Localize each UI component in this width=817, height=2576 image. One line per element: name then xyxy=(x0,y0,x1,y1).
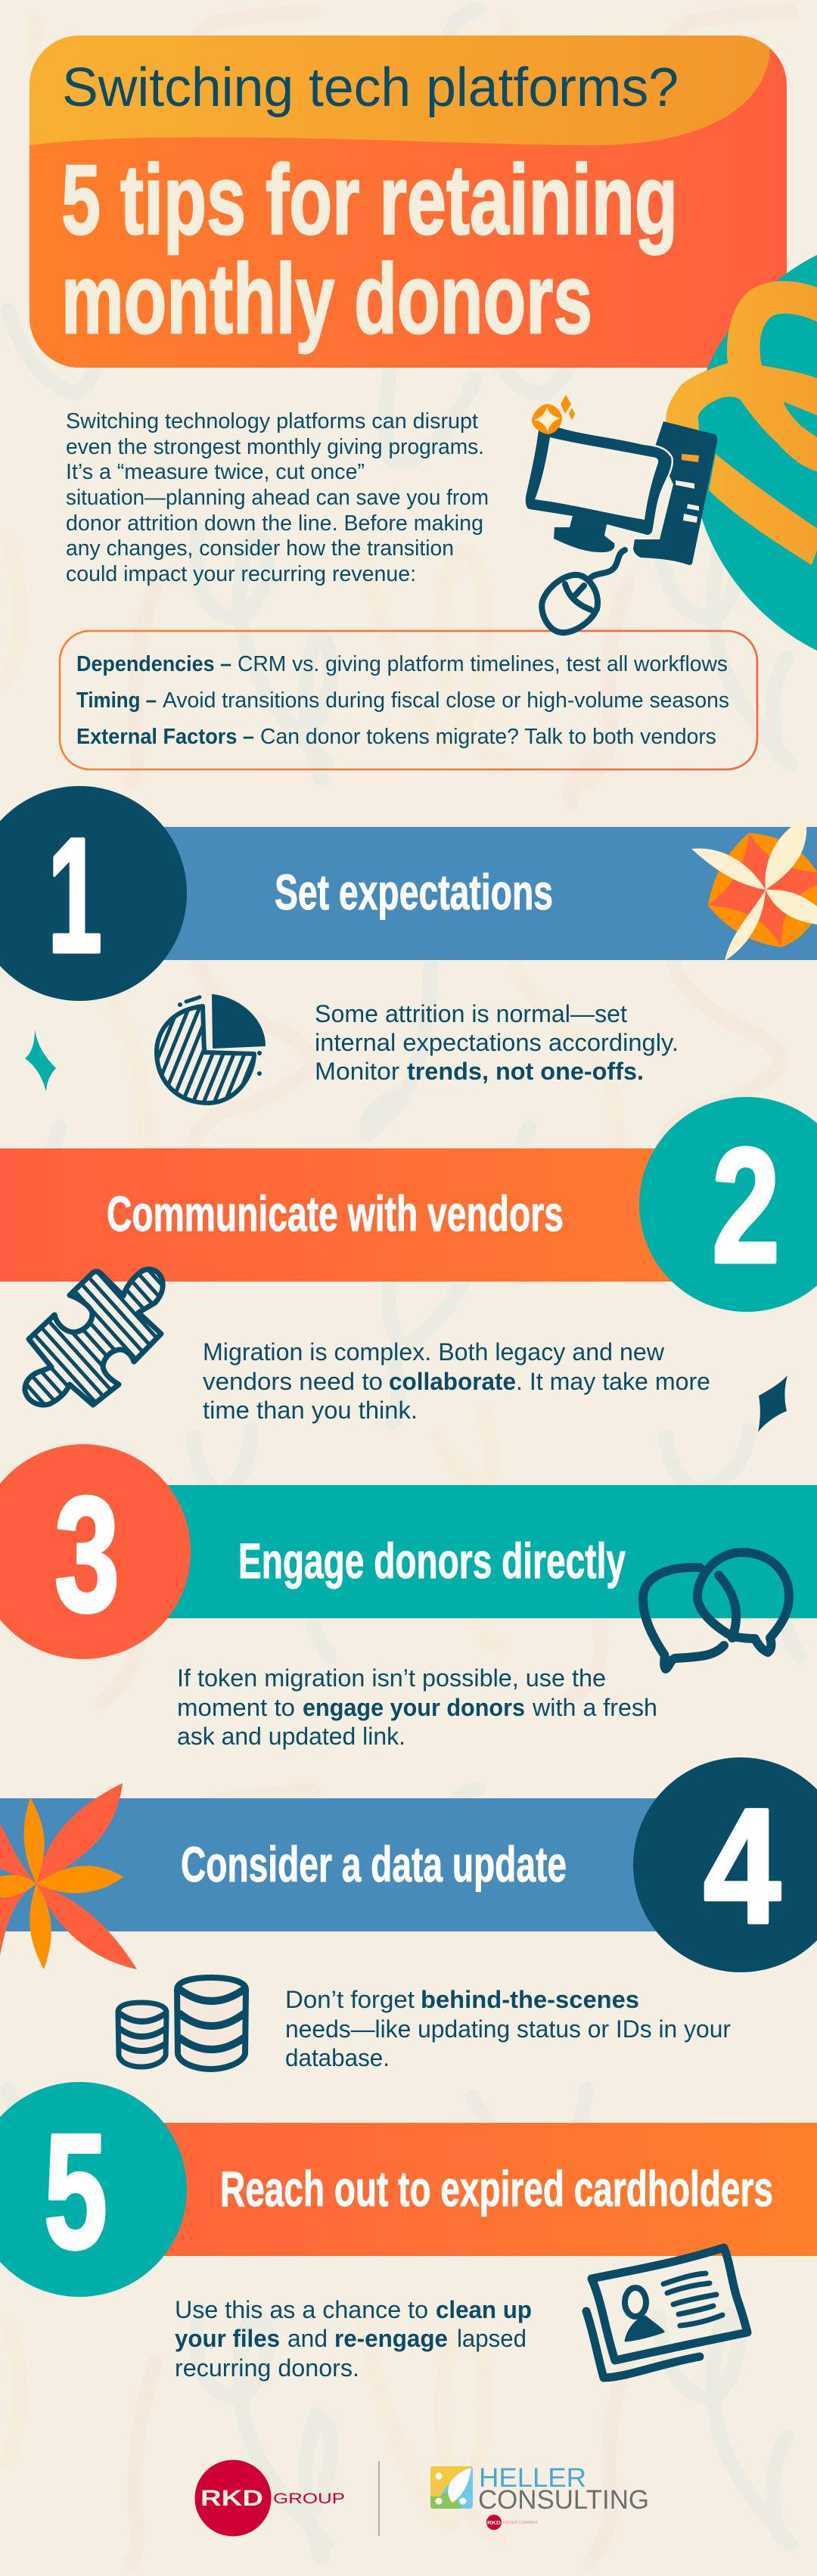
small RKD mark: GROUP COMPANY xyxy=(503,2521,539,2525)
body text 3: with a fresh xyxy=(532,1694,657,1721)
panel: tip 2 xyxy=(0,1097,817,1432)
icon: Heller mark xyxy=(430,2466,473,2509)
body text 4: Don’t forget xyxy=(285,1986,415,2013)
body text 2: vendors need to xyxy=(203,1368,383,1395)
number 5: 5 xyxy=(44,2099,107,2282)
body text 5: your files xyxy=(175,2325,280,2352)
body text 5 xyxy=(175,2296,532,2382)
logo: Heller Consulting xyxy=(430,2463,649,2530)
panel: considerations box xyxy=(60,631,757,769)
text block: intro: Switching technology platforms can disrupt xyxy=(66,409,478,433)
text: timing: Avoid transitions during fiscal close or high-volume seasons xyxy=(163,688,729,713)
text block: intro: situation—planning ahead can save you from xyxy=(66,486,489,510)
body text 4: behind-the-scenes xyxy=(421,1986,639,2013)
panel: title header xyxy=(23,23,787,368)
text block: intro: could impact your recurring revenue: xyxy=(66,562,416,586)
text: external factors: External Factors – xyxy=(76,725,254,749)
flower 2 xyxy=(0,1783,137,1969)
body text 3: ask and updated link. xyxy=(177,1723,405,1750)
icon: pie chart xyxy=(157,995,265,1103)
banner 3 xyxy=(0,1485,817,1618)
number circle 3 xyxy=(0,1444,191,1659)
banner 5 xyxy=(0,2123,817,2256)
body text 5: clean up xyxy=(436,2296,532,2323)
body text 1: Monitor xyxy=(315,1058,399,1085)
panel: tip 1 xyxy=(0,786,817,1103)
text block: intro xyxy=(66,409,489,586)
text block: intro: donor attrition down the line. Before making xyxy=(66,511,483,536)
body text 3: engage your donors xyxy=(303,1694,525,1721)
divider xyxy=(378,2461,380,2536)
body text 5: Use this as a chance to xyxy=(175,2296,428,2323)
heading 2: Communicate with vendors xyxy=(107,1185,564,1241)
icon: computer with mouse xyxy=(526,395,717,632)
number circle 1 xyxy=(0,786,187,1001)
body text 4: needs—like updating status or IDs in your xyxy=(285,2015,731,2043)
body text 3 xyxy=(177,1664,657,1750)
mouse xyxy=(542,550,625,632)
banner 1 xyxy=(0,827,817,960)
decoration: teal blob with orange ribbon xyxy=(666,255,817,651)
text: dependencies: Dependencies – xyxy=(76,652,231,676)
body text 3: moment to xyxy=(177,1694,295,1721)
body text 1: trends, not one-offs. xyxy=(407,1058,644,1085)
text: external factors: Can donor tokens migrate? Talk to both vendors xyxy=(260,725,716,749)
flower 1 xyxy=(691,817,817,961)
title: 5 tips for retaining monthly donors: monthly donors xyxy=(61,243,592,354)
panel: tip 4 xyxy=(0,1757,817,2071)
body text 5: re-engage xyxy=(334,2325,448,2352)
body text 1 xyxy=(315,1000,679,1085)
icon: dark sparkle xyxy=(758,1375,787,1432)
heading 3: Engage donors directly xyxy=(238,1533,626,1589)
panel: tip 5 xyxy=(0,2082,817,2382)
heading: switching tech platforms: Switching tech platforms? xyxy=(62,57,679,118)
logo: RKD Group: GROUP xyxy=(273,2491,345,2507)
title: 5 tips for retaining monthly donors xyxy=(61,144,678,354)
body text 3: If token migration isn’t possible, use the xyxy=(177,1664,606,1692)
logo: RKD Group xyxy=(195,2460,345,2536)
body text 5: lapsed xyxy=(457,2325,527,2352)
sparkles xyxy=(532,404,562,434)
number 3: 3 xyxy=(54,1462,120,1645)
icon: puzzle piece xyxy=(25,1269,163,1405)
banner 2 xyxy=(0,1148,817,1282)
logo: Heller Consulting: CONSULTING xyxy=(478,2485,649,2515)
icon: ID card xyxy=(586,2248,747,2378)
body text 2: Migration is complex. Both legacy and new xyxy=(203,1338,665,1366)
banner 4 xyxy=(0,1798,817,1931)
body text 2 xyxy=(203,1338,710,1424)
number 4: 4 xyxy=(704,1774,781,1957)
body text 1: internal expectations accordingly. xyxy=(315,1029,679,1056)
body text 5: and xyxy=(287,2325,328,2352)
body text 2: time than you think. xyxy=(203,1397,418,1424)
logo: RKD Group: RKD xyxy=(200,2486,263,2511)
small RKD mark xyxy=(486,2515,539,2530)
text block: intro: even the strongest monthly giving programs. xyxy=(66,435,484,459)
body text 5: recurring donors. xyxy=(175,2354,359,2382)
icon: speech bubbles xyxy=(643,1552,789,1669)
body text 4: database. xyxy=(285,2044,390,2071)
monitor xyxy=(526,426,672,552)
number circle 4 xyxy=(633,1757,817,1972)
heading 4: Consider a data update xyxy=(181,1836,567,1892)
body text 1: Some attrition is normal—set xyxy=(315,1000,627,1027)
body text 4 xyxy=(285,1986,731,2071)
small RKD mark: RKD xyxy=(487,2521,501,2526)
number circle 5 xyxy=(0,2082,187,2297)
number circle 2 xyxy=(639,1097,817,1312)
text: timing: Timing – xyxy=(76,688,157,713)
text block: intro: any changes, consider how the transition xyxy=(66,536,454,561)
heading 1: Set expectations xyxy=(275,864,553,920)
number 2: 2 xyxy=(712,1114,780,1297)
panel: tip 3 xyxy=(0,1444,817,1750)
icon: teal sparkle xyxy=(25,1030,56,1092)
body text 2: . It may take more xyxy=(516,1368,710,1395)
body text 2: collaborate xyxy=(389,1368,516,1395)
number 1: 1 xyxy=(48,803,102,987)
logo: Heller Consulting: HELLER xyxy=(479,2463,586,2493)
icon: database stacks xyxy=(118,1978,246,2069)
tower xyxy=(633,421,717,565)
text block: intro: It’s a “measure twice, cut once” xyxy=(66,460,365,484)
text: dependencies: CRM vs. giving platform timelines, test all workflows xyxy=(238,652,728,676)
